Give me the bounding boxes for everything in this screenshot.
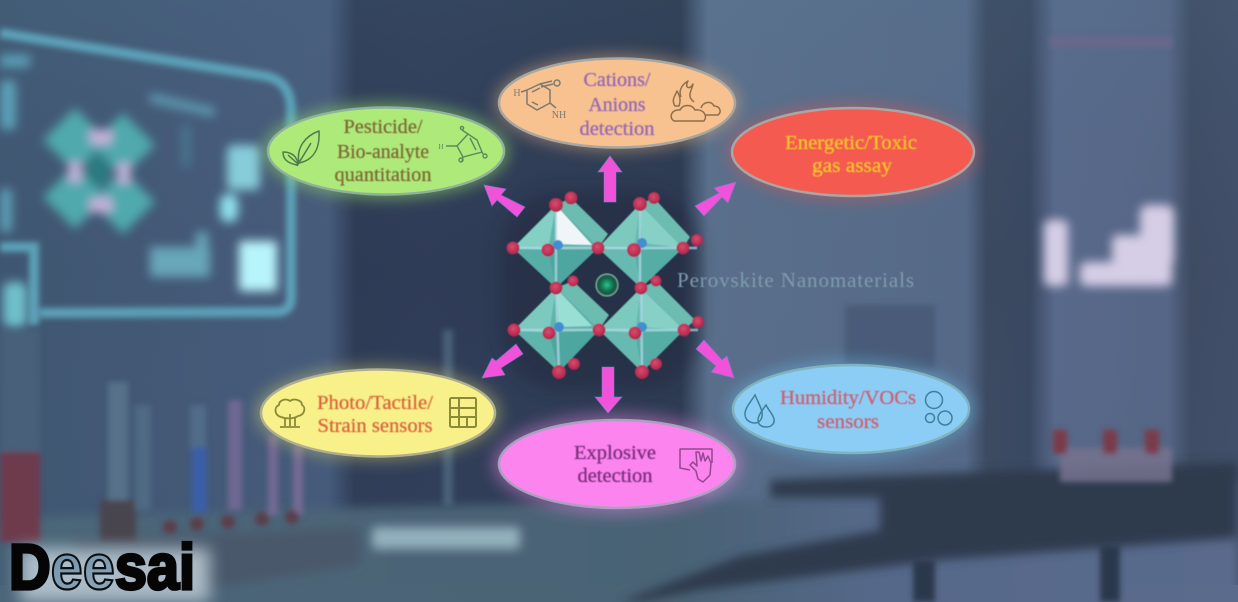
icon: leaves [283,131,319,166]
ellipse: cations / anions [495,55,739,151]
ellipse: photo / tactile / strain: Photo/Tactile/ [317,392,433,414]
ellipse: pesticide / bio-analyte: Pesticide/ [344,116,423,138]
icon: fire and clouds [671,81,720,121]
ellipse: photo / tactile / strain [256,366,500,460]
icon: tree [275,400,304,427]
back octahedra [556,198,695,330]
icon: water drops [745,395,774,427]
icon: molecule ring [513,80,566,121]
ellipse: cations / anions: Anions [588,94,646,116]
icon: molecule [438,126,487,162]
ellipse: energetic / toxic gas [728,104,978,200]
ellipse: photo / tactile / strain: Strain sensors [318,415,433,437]
octahedron bottom left [514,288,599,372]
icon: molecule ring: H [513,88,521,99]
ellipse: humidity / VOCs: sensors [817,411,879,433]
ellipse: energetic / toxic gas: gas assay [812,155,892,177]
halide atoms [506,192,704,379]
ellipse: humidity / VOCs [728,360,974,458]
logo: Deesai: Deesai [9,531,195,602]
ellipse: cations / anions: detection [580,118,654,140]
ellipse: humidity / VOCs: Humidity/VOCs [780,387,916,409]
outward arrows [482,156,736,413]
octahedron top right [598,204,697,288]
central green cation [596,274,618,296]
octahedron top left [513,205,598,288]
ellipse: energetic / toxic gas: Energetic/Toxic [785,132,917,154]
octahedron bottom right [599,288,698,372]
ellipse: pesticide / bio-analyte: quantitation [334,164,432,186]
perovskite crystal structure [506,192,704,379]
icon: molecule ring: NH [552,110,566,121]
left glass screen [0,33,291,327]
icon: hand on touch panel [680,449,712,482]
icon: bubbles [926,392,952,425]
ellipse: pesticide / bio-analyte: Bio-analyte [337,141,429,163]
icon: grid panel [450,398,476,427]
ellipse: explosive detection: Explosive [574,442,656,464]
central label: Perovskite Nanomaterials [677,268,914,292]
ellipse: explosive detection: detection [578,465,652,487]
ellipse: explosive detection [493,414,741,514]
icon: molecule: H [438,143,444,151]
ellipse: pesticide / bio-analyte [264,104,508,198]
blurred wall monitor glow [1044,205,1174,286]
blurred glassware [0,36,1172,542]
ellipse: cations / anions: Cations/ [584,69,651,91]
